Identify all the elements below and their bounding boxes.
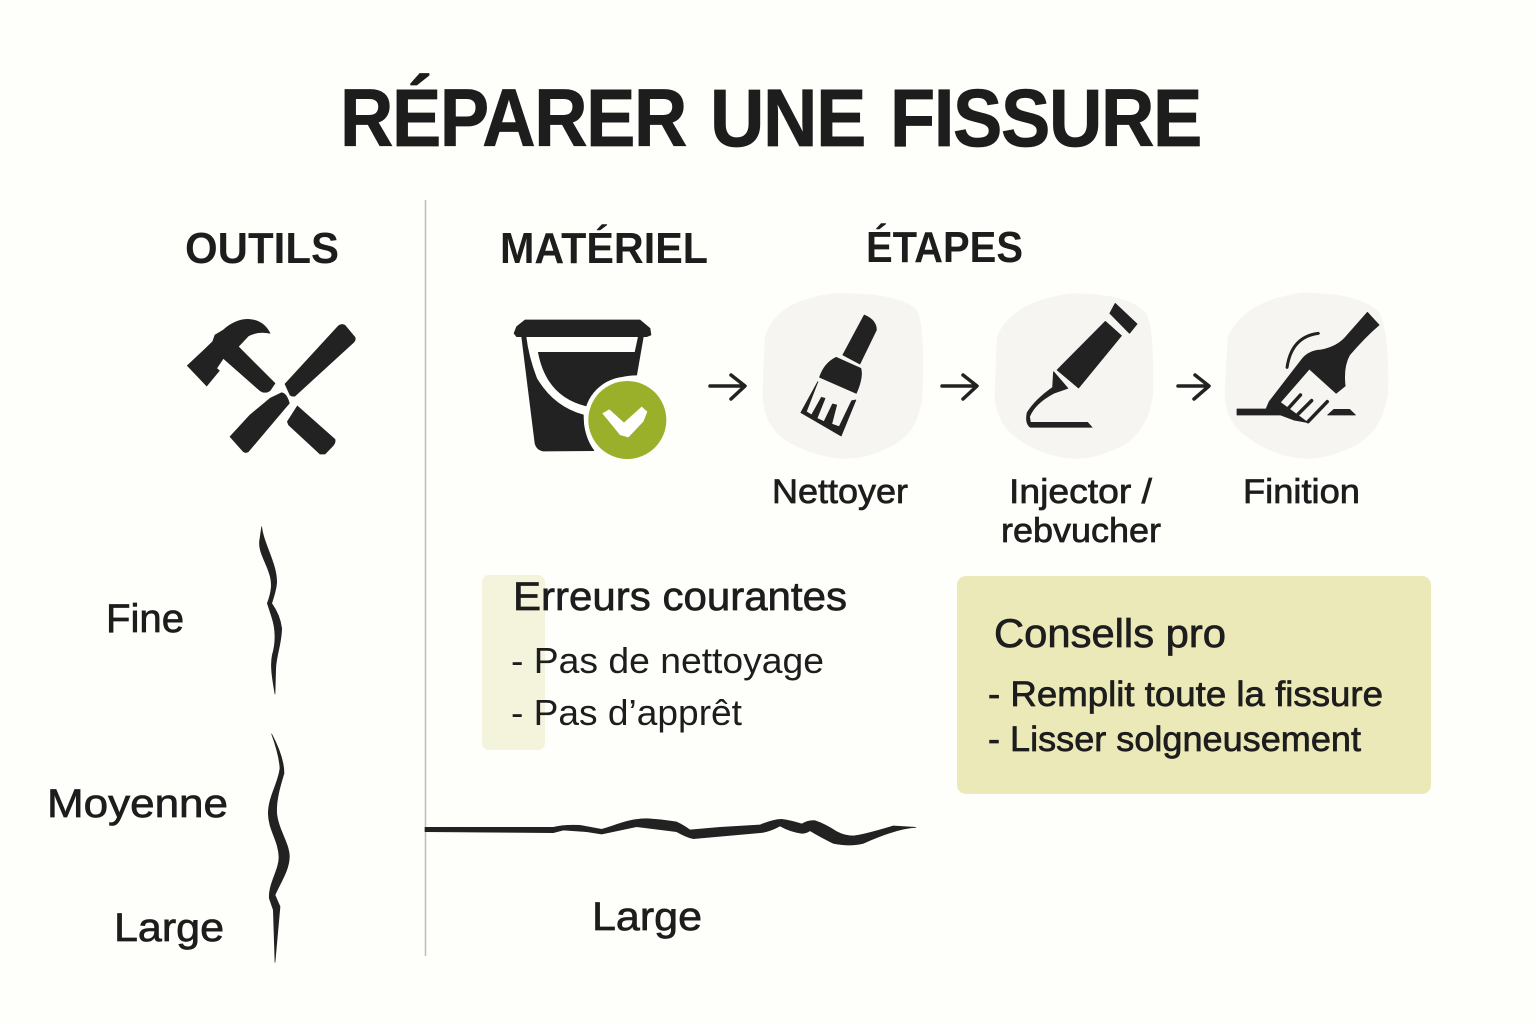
icon: crossed hammer and chisel — [187, 319, 355, 454]
icon: bucket with check — [514, 320, 671, 463]
label: nettoyer: Nettoyer — [772, 473, 908, 511]
title: RÉPARER — [340, 73, 686, 164]
heading: matériel: MATÉRIEL — [500, 223, 708, 273]
crack: fine — [259, 527, 282, 694]
item: remplit: - Remplit toute la fissure — [988, 675, 1383, 714]
label: large (bottom): Large — [592, 895, 702, 939]
item: nettoyage: - Pas de nettoyage — [511, 640, 824, 681]
arrow 2 — [942, 375, 977, 399]
heading: étapes: ÉTAPES — [866, 222, 1023, 272]
panel: erreurs courantes — [482, 575, 847, 750]
panel: conseils pro — [957, 576, 1431, 794]
label: injector: Injector / — [1009, 473, 1153, 511]
heading: conseils: Consells pro — [994, 612, 1226, 656]
heading: outils: OUTILS — [185, 224, 339, 273]
heading: erreurs: Erreurs courantes — [513, 575, 847, 619]
arrow 3 — [1178, 375, 1209, 399]
arrow 1 — [710, 375, 745, 399]
title — [340, 73, 1201, 164]
step 1 icon: brush — [763, 293, 923, 459]
label: rebvucher: rebvucher — [1001, 512, 1161, 550]
label: large (left): Large — [114, 906, 224, 950]
crack: medium and large — [268, 734, 289, 962]
label: finition: Finition — [1243, 473, 1360, 511]
label: moyenne: Moyenne — [47, 782, 228, 826]
title: UNE — [710, 73, 865, 164]
step 3 icon: finishing trowel — [1225, 293, 1388, 459]
title: FISSURE — [890, 73, 1201, 164]
step 2 icon: injector tube — [995, 293, 1153, 459]
crack: horizontal large — [425, 819, 916, 845]
item: lisser: - Lisser solgneusement — [988, 720, 1361, 759]
step labels — [772, 473, 1360, 550]
item: apprêt: - Pas d’apprêt — [511, 692, 742, 733]
label: fine: Fine — [106, 597, 184, 641]
